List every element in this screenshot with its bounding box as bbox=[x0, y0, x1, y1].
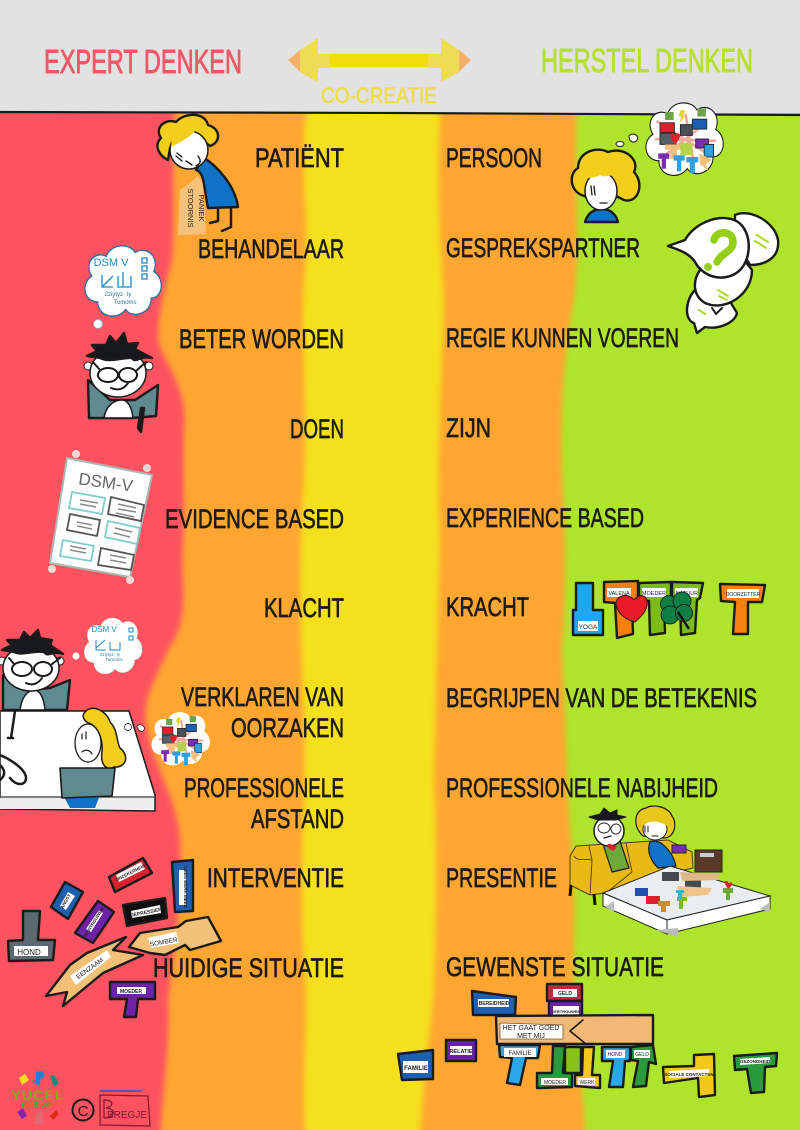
icon: scattered problem cards: EENZAAM bbox=[75, 957, 105, 981]
practitioner behind desk bbox=[0, 630, 70, 710]
left column terms: PROFESSIONELE bbox=[184, 773, 344, 803]
left column terms: BETER WORDEN bbox=[179, 324, 344, 354]
dsm thought cloud small bbox=[84, 618, 142, 674]
icon: scattered problem cards: SOMBER bbox=[149, 937, 179, 948]
icon: recovery tags: RELATIE bbox=[449, 1049, 473, 1055]
icon: scattered problem cards bbox=[8, 858, 221, 1017]
icon: patient with label tag bbox=[157, 115, 238, 235]
orange arrow: het gaat goed met mij: HET GAAT GOED bbox=[503, 1025, 559, 1032]
left column terms: AFSTAND bbox=[251, 804, 344, 834]
icon: recovery tags: VERTROUWEN bbox=[552, 1009, 581, 1014]
right column terms: GEWENSTE SITUATIE bbox=[446, 952, 664, 982]
icon: recovery tags: SOCIALE CONTACTEN bbox=[664, 1072, 714, 1077]
header band bbox=[0, 0, 800, 115]
icon: scattered problem cards: ONZEKERHEID bbox=[115, 863, 147, 882]
orange arrow: het gaat goed met mij: MET MIJ bbox=[517, 1033, 545, 1040]
heading: expert denken: EXPERT DENKEN bbox=[44, 43, 242, 80]
right column terms: PERSOON bbox=[446, 143, 542, 173]
icon: scattered problem cards: WANTROUWEN bbox=[83, 907, 105, 938]
dsm thought cloud: Tumoms bbox=[113, 300, 137, 306]
icon: strength tags: NATUUR bbox=[676, 591, 698, 597]
copyright symbol: C bbox=[78, 1103, 89, 1120]
practitioner on sofa bbox=[589, 808, 629, 872]
icon: scattered problem cards: HOND bbox=[17, 948, 41, 957]
left column terms: INTERVENTIE bbox=[207, 863, 344, 893]
right column terms: REGIE KUNNEN VOEREN bbox=[446, 323, 679, 353]
right column terms: PRESENTIE bbox=[446, 863, 557, 893]
dsm thought cloud small: Tumoms bbox=[105, 657, 123, 662]
icon: recovery tags: GELD bbox=[558, 991, 572, 997]
icon: scattered problem cards: ANGST bbox=[60, 893, 72, 909]
clover bbox=[660, 592, 692, 629]
dsm thought cloud: DSM V bbox=[94, 257, 129, 269]
icon: DSM-V document: DSM-V bbox=[77, 469, 135, 496]
right column terms: GESPREKSPARTNER bbox=[446, 233, 640, 263]
left column terms: HUIDIGE SITUATIE bbox=[153, 953, 344, 983]
icon: strength tags: YOGA bbox=[579, 624, 598, 631]
logo: bregje: BREGJE bbox=[107, 1110, 147, 1121]
logo: bregje bbox=[100, 1091, 150, 1126]
icon: recovery tags bbox=[398, 984, 777, 1097]
icon: presentie sofa scene bbox=[570, 806, 770, 937]
dsm thought cloud small: 2ziytyz· Iy bbox=[100, 652, 121, 657]
label: co-creatie: CO-CREATIE bbox=[321, 83, 437, 108]
arrow: co-creatie double arrow bbox=[288, 38, 471, 82]
icon: scattered problem cards: DEPRESSIEF bbox=[130, 907, 162, 919]
icon: recovery tags: FAMILIE bbox=[508, 1051, 532, 1057]
patient tag bbox=[178, 176, 206, 235]
right column terms: ZIJN bbox=[446, 413, 491, 443]
left column terms: DOEN bbox=[290, 414, 344, 444]
icon: speech bubbles with question mark bbox=[668, 213, 778, 333]
icon: scattered problem cards: MOEDER bbox=[120, 989, 142, 995]
right column terms: EXPERIENCE BASED bbox=[446, 503, 644, 533]
briefcase bbox=[695, 850, 722, 872]
icon: recovery tags: BEREIDHEID bbox=[479, 1001, 510, 1007]
tag thought cloud bbox=[152, 712, 210, 765]
dsm thought cloud: 2ziytyz· Iy bbox=[105, 292, 131, 298]
icon: recovery tags: HOND bbox=[608, 1052, 623, 1058]
table bbox=[603, 866, 770, 920]
icon: strength tags bbox=[573, 581, 765, 638]
icon: recovery tags: WERK bbox=[580, 1080, 595, 1086]
left column terms: OORZAKEN bbox=[231, 713, 344, 743]
patient on sofa bbox=[636, 806, 676, 868]
icon: scattered problem cards: GEEN WERK MEER bbox=[183, 866, 188, 909]
left column terms: EVIDENCE BASED bbox=[165, 504, 344, 534]
icon: strength tags: VALENA bbox=[608, 591, 630, 597]
orange arrow: het gaat goed met mij bbox=[496, 1015, 653, 1044]
icon: recovery tags: MOEDER bbox=[544, 1080, 566, 1086]
patient tag: STOORNIS bbox=[186, 188, 195, 228]
dsm thought cloud bbox=[85, 246, 161, 316]
sofa bbox=[570, 840, 693, 895]
logo: yucel methode: YUCEL bbox=[11, 1087, 65, 1103]
icon: consultation at table bbox=[0, 618, 210, 811]
icon: strength tags: MOEDER bbox=[642, 591, 666, 597]
icon: recovery tags: FAMILIE bbox=[404, 1066, 428, 1072]
icon: strength tags: DOORZETTER bbox=[726, 592, 761, 598]
icon: practitioner with thought cloud bbox=[84, 246, 161, 432]
left column terms bbox=[153, 143, 344, 983]
right column terms bbox=[446, 143, 757, 982]
icon: recovery tags: GELD bbox=[635, 1052, 649, 1058]
icon: DSM-V document bbox=[48, 450, 152, 584]
icon: recovery tags: GEZONDHEID bbox=[740, 1059, 771, 1064]
heart bbox=[616, 595, 647, 622]
dsm thought cloud small: DSM V bbox=[91, 625, 117, 634]
left column terms: PATIËNT bbox=[255, 143, 344, 173]
patient tag: PANIEK bbox=[197, 195, 206, 221]
thought cloud with tags bbox=[646, 103, 723, 175]
right column terms: KRACHT bbox=[446, 592, 529, 622]
patient seen from behind bbox=[60, 708, 126, 808]
left column terms: KLACHT bbox=[264, 593, 344, 623]
icon: person with thought cloud bbox=[572, 103, 723, 222]
logo: yucel methode: methode bbox=[21, 1100, 55, 1109]
left column terms: BEHANDELAAR bbox=[198, 234, 344, 264]
left column terms: VERKLAREN VAN bbox=[181, 682, 344, 712]
copyright symbol bbox=[72, 1100, 94, 1120]
table tags bbox=[635, 872, 733, 912]
logo: yucel methode bbox=[11, 1071, 65, 1124]
